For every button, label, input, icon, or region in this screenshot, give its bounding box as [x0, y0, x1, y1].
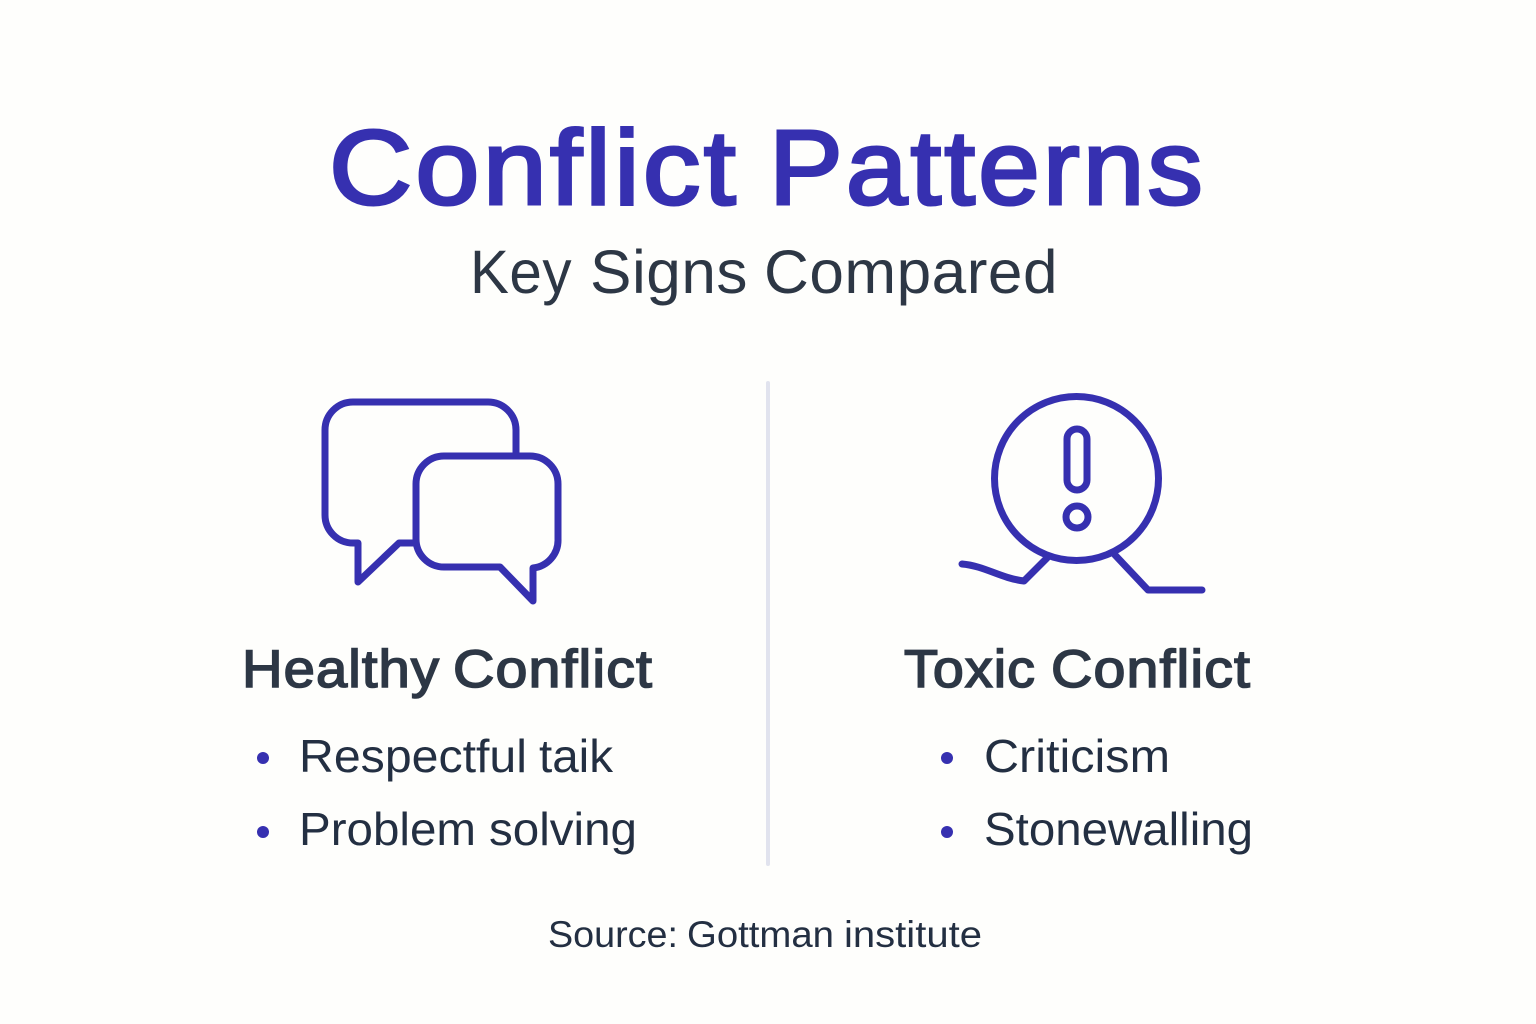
panel: healthy conflict [242, 402, 653, 855]
list item: respectful talk: taik [539, 730, 614, 782]
subtitle: Compared [764, 238, 1058, 306]
icon: warning circle with trailing lines [962, 396, 1202, 590]
title [329, 109, 1206, 227]
list item: criticism: Criticism [984, 730, 1170, 782]
heading: healthy conflict [242, 640, 653, 699]
list item: problem solving: Problem [299, 803, 476, 855]
list item: problem solving [257, 803, 637, 855]
title: Patterns [769, 109, 1206, 227]
source note: Gottman [687, 914, 834, 955]
divider [766, 381, 770, 866]
heading: toxic conflict: Toxic [904, 640, 1036, 699]
panel: toxic conflict [904, 396, 1253, 855]
source note: Source: [548, 914, 678, 955]
heading: healthy conflict: Healthy [242, 640, 440, 699]
icon: overlapping speech bubbles [325, 402, 558, 601]
heading: toxic conflict [904, 640, 1251, 699]
source note [548, 914, 982, 955]
subtitle [470, 238, 1058, 306]
title: Conflict [329, 109, 739, 227]
list item: problem solving: solving [489, 803, 637, 855]
list item: stonewalling: Stonewalling [984, 803, 1253, 855]
subtitle: Key [470, 238, 572, 306]
list item: respectful talk [257, 730, 614, 782]
source note: institute [844, 914, 982, 955]
heading: healthy conflict: Conflict [453, 640, 653, 699]
list item: respectful talk: Respectful [299, 730, 527, 782]
heading: toxic conflict: Conflict [1051, 640, 1251, 699]
subtitle: Signs [590, 238, 748, 306]
